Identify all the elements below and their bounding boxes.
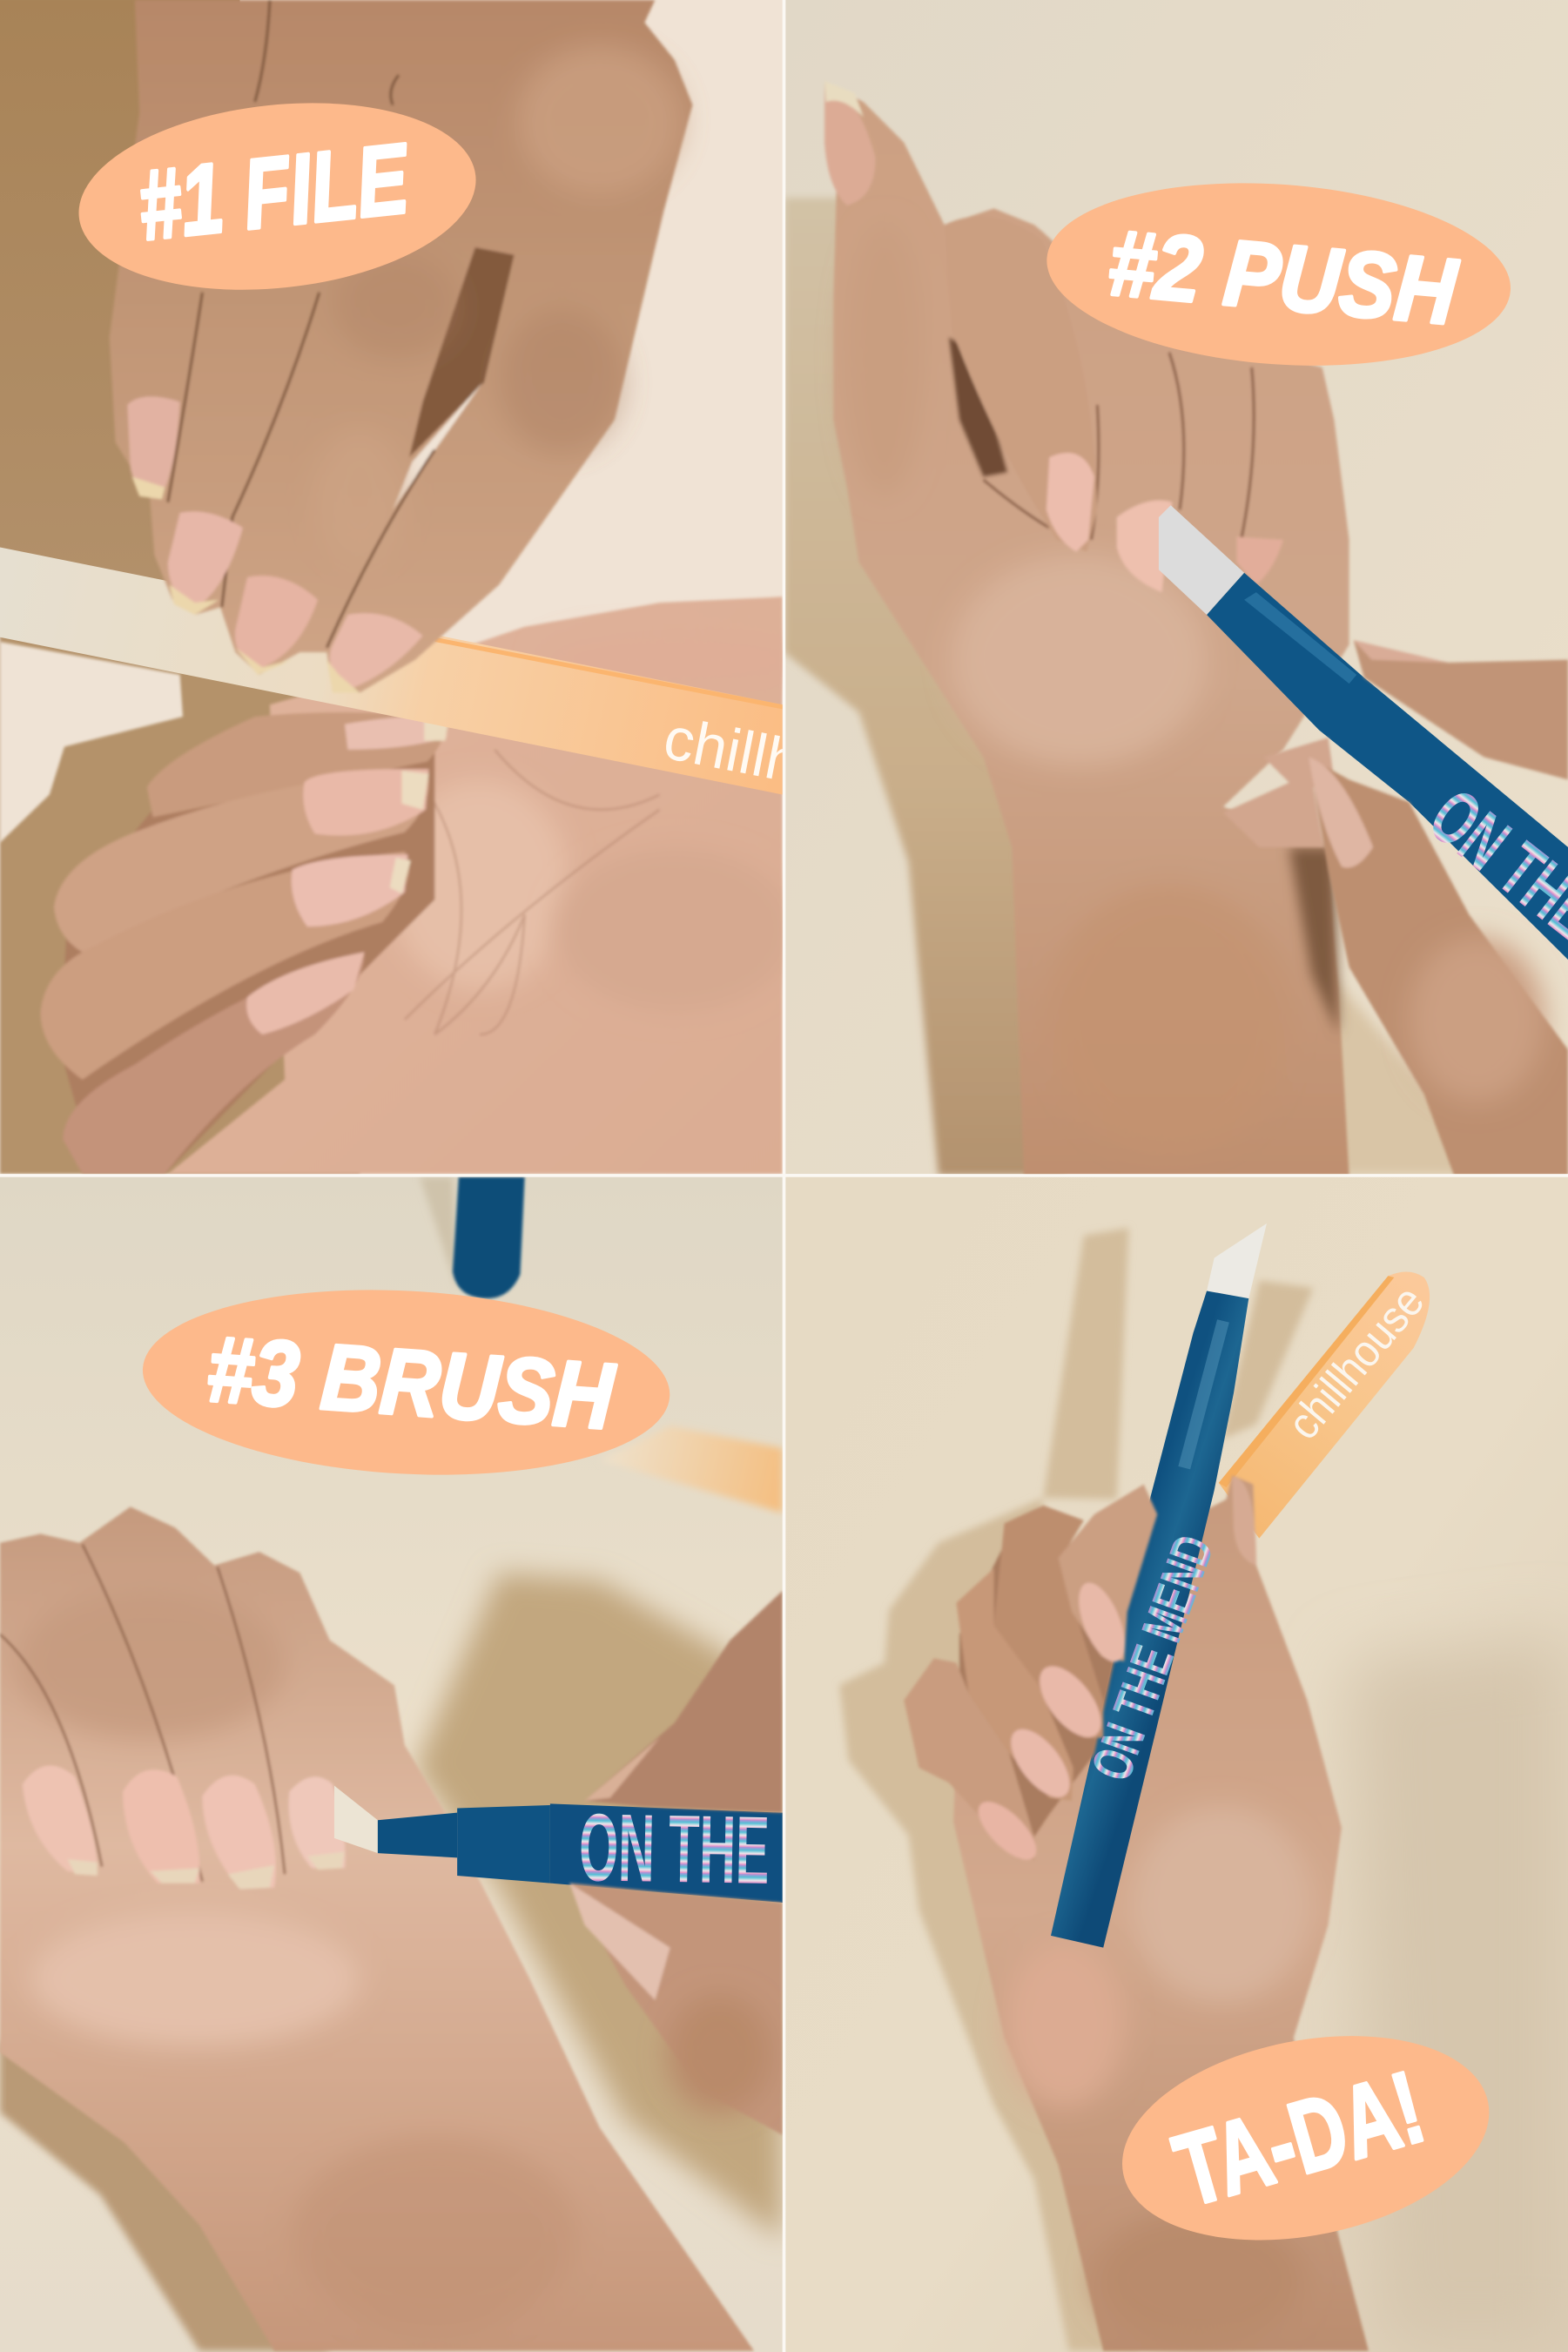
- left hand: [824, 81, 1349, 1176]
- finger separations: [983, 353, 1254, 540]
- finger separations: [168, 0, 434, 648]
- pen neck: [378, 1813, 457, 1857]
- curled fingers: [904, 1485, 1157, 1869]
- panel: ta-da result: [785, 1177, 1568, 2352]
- nails lower hand: [345, 716, 447, 750]
- panel: step 1 file: [0, 0, 783, 1174]
- finger separations: [0, 1544, 285, 1882]
- shadow behind the hands: [0, 0, 360, 1174]
- label: #3 brush: #3 BRUSH: [204, 1316, 618, 1449]
- pen body: [550, 1803, 783, 1903]
- finger 2: [54, 769, 428, 952]
- gap between thumb and index: [949, 337, 1007, 477]
- finger 4: [904, 1658, 1036, 1861]
- blurred file in background: [600, 1425, 783, 1513]
- label: ta-da: TA-DA!: [1163, 2049, 1436, 2228]
- label: #2 push: [1040, 168, 1517, 381]
- file brand text: chillhouse: [658, 704, 933, 821]
- panel: step 2 push: [784, 0, 1568, 1176]
- panel: step 3 brush: [0, 1177, 932, 2352]
- nails: [824, 81, 876, 206]
- cuticle pusher tool: [1159, 505, 1568, 1053]
- nail file: [0, 547, 933, 821]
- finger 2: [994, 1506, 1103, 1738]
- label: #2 push: #2 PUSH: [1105, 210, 1462, 344]
- pen lettering: ON THE MEND: [578, 1794, 932, 1907]
- palm lightness: [952, 555, 1207, 765]
- wrist shadow: [1289, 847, 1339, 1034]
- brush tip: [334, 1786, 378, 1853]
- nail tips lower: [390, 717, 448, 893]
- label: #3 brush: [138, 1277, 675, 1487]
- pen body: [1051, 1291, 1248, 1948]
- curled index finger: [945, 217, 1097, 552]
- hand shadow: [415, 1573, 783, 2240]
- silicone tip: [1207, 1223, 1267, 1298]
- file brand text: chillhouse: [1277, 1276, 1434, 1448]
- finger 1: [1059, 1485, 1157, 1661]
- label: #1 file: #1 FILE: [133, 123, 415, 261]
- panel 3 background: [0, 1177, 783, 2352]
- finger 3: [40, 852, 409, 1080]
- finger backing: [959, 1544, 1117, 1859]
- palm: [168, 596, 783, 1174]
- panel 4 background: [785, 1177, 1568, 2352]
- thumb nail: [569, 1884, 670, 2000]
- finger 3: [957, 1568, 1073, 1801]
- pen body: [1207, 573, 1568, 960]
- blurred pen cap in background: [420, 1177, 525, 1298]
- nail tips: [67, 1851, 345, 1889]
- finger 1: [147, 712, 443, 817]
- pen mid section: [457, 1805, 550, 1884]
- pen lettering: ON THE MEND: [1079, 1527, 1226, 1789]
- nails: [1069, 1577, 1134, 1668]
- nails: [23, 1766, 98, 1874]
- right hand nail: [1309, 758, 1373, 868]
- nails upper hand: [127, 396, 180, 495]
- glass nail file: [1219, 1271, 1434, 1539]
- silicone tip: [1159, 505, 1244, 615]
- thumb nail: [1232, 1477, 1256, 1566]
- finger backing: [64, 753, 436, 1162]
- holding hand: [569, 1591, 783, 2135]
- knuckle shading: [499, 310, 625, 455]
- right hand holding tool: [1223, 640, 1568, 1176]
- finger nail: [585, 1738, 660, 1801]
- upper hand filing: [110, 0, 692, 692]
- palm and thumb: [953, 1475, 1369, 2351]
- panel 1 background: [0, 0, 783, 1174]
- palm creases: [405, 750, 660, 1034]
- panel 2 background: [785, 0, 1568, 1174]
- hand shadow: [784, 198, 1064, 1176]
- nail tips upper: [132, 477, 360, 692]
- label: #1 file: [70, 84, 485, 308]
- lower hand: palm and fingers: [40, 596, 810, 1174]
- pen in hand: [1051, 1223, 1267, 1948]
- label: ta-da: [1105, 2007, 1507, 2269]
- hand being treated: [0, 1506, 754, 2351]
- hand shadow: [839, 1228, 1313, 2351]
- finger 4: [63, 952, 365, 1174]
- notch between fingers: [409, 247, 515, 457]
- brush pen: [334, 1786, 932, 1907]
